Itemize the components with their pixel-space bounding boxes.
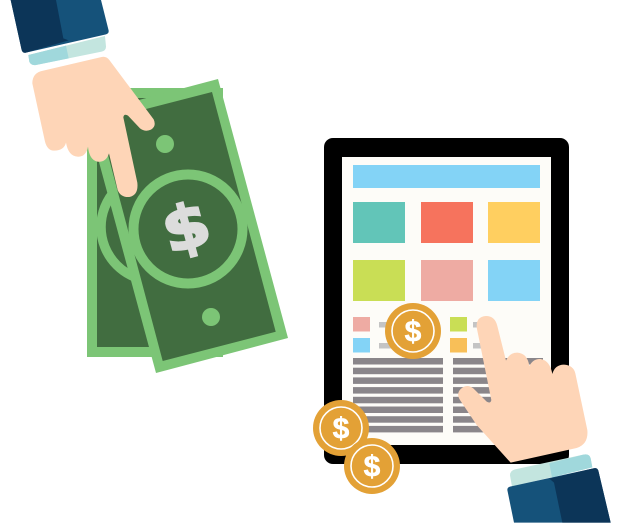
right sleeve [507, 468, 611, 523]
header bar [353, 165, 540, 188]
coin on tablet: $ [405, 316, 422, 348]
tablet body [324, 138, 569, 464]
banknote ring [134, 174, 242, 284]
coin on tablet [385, 303, 441, 359]
banknote dot top [156, 135, 174, 153]
coin lower left: $ [333, 412, 350, 446]
front banknote [86, 79, 288, 373]
back banknote [87, 88, 223, 357]
left sleeve [11, 0, 109, 53]
left hand with sleeve [11, 0, 155, 197]
coin lower right [344, 438, 400, 494]
tablet [324, 138, 569, 464]
legend items [353, 317, 487, 352]
dollar sign: $ [155, 189, 218, 268]
coin lower left [313, 400, 369, 456]
left hand pointing [32, 57, 155, 197]
right hand pointing [458, 316, 587, 463]
left cuff [28, 36, 106, 65]
banknote dot bottom [202, 308, 220, 326]
colour tiles [353, 202, 540, 301]
text lines left column [353, 358, 443, 432]
text lines right column [453, 358, 543, 432]
right hand with sleeve [458, 316, 611, 523]
coin lower right: $ [364, 450, 381, 484]
right cuff [510, 454, 592, 487]
tablet screen [342, 157, 551, 445]
